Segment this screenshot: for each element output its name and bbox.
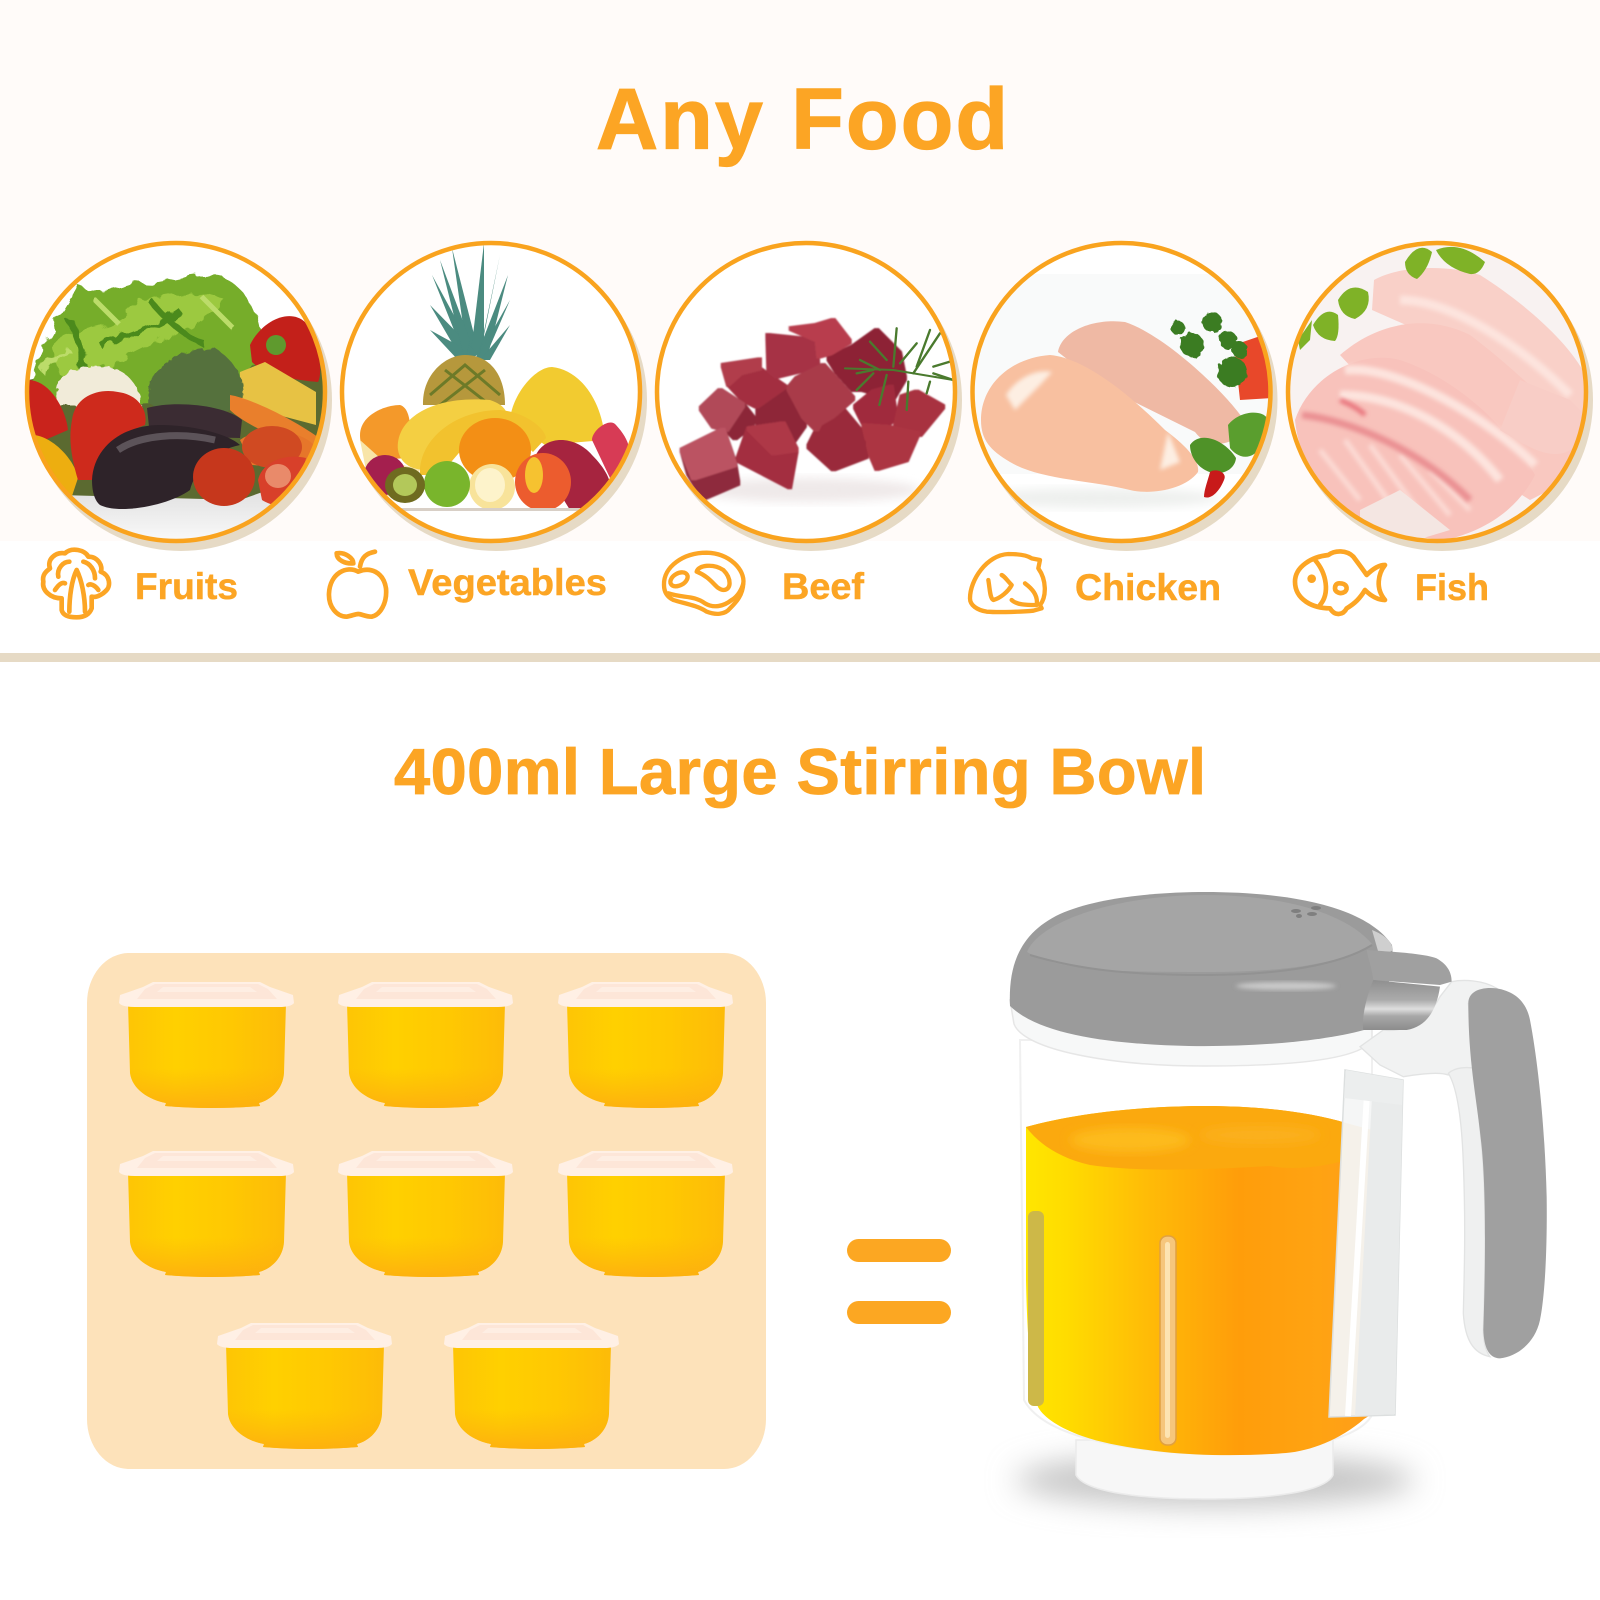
clear handle upper arm — [1360, 980, 1497, 1077]
slot blades — [1028, 1211, 1176, 1445]
lid tab — [1367, 950, 1452, 985]
icon: broccoli — [43, 550, 109, 617]
heading: 400ml Large Stirring Bowl: 400ml Large Stirring Bowl — [394, 735, 1206, 808]
panel: beef photo circle — [657, 243, 962, 551]
handle connector — [1363, 980, 1440, 1030]
label: Vegetables: Vegetables — [408, 562, 607, 603]
clear handle lower arm — [1448, 1068, 1490, 1357]
rosemary sprig — [845, 328, 953, 410]
grey handle grip — [1468, 988, 1547, 1358]
jug shadow — [1015, 1454, 1415, 1506]
cup row 3 — [217, 1323, 619, 1449]
jug glass body — [1020, 1040, 1372, 1454]
panel: fish photo circle — [1288, 243, 1593, 551]
clear front spout — [1329, 1070, 1403, 1417]
top background band — [0, 0, 1600, 541]
label: Fruits: Fruits — [135, 566, 238, 607]
panel: chicken photo circle — [970, 243, 1278, 551]
panel: fruits photo circle — [342, 243, 647, 551]
cup row 1 — [119, 982, 733, 1108]
panel: vegetables photo circle — [20, 243, 340, 551]
icon: fish — [1295, 551, 1385, 614]
icon: apple — [329, 552, 386, 617]
grey lid — [1010, 892, 1393, 1046]
orange liquid — [1026, 1106, 1372, 1455]
panel: eight storage cups — [87, 953, 766, 1469]
blender jug — [1010, 892, 1547, 1506]
lid rim — [1010, 1000, 1372, 1066]
beef cubes — [682, 320, 943, 498]
icon: chicken — [970, 554, 1045, 612]
title: Any Food: Any Food — [596, 72, 1008, 168]
label: Fish: Fish — [1415, 567, 1489, 608]
label: Beef: Beef — [782, 566, 865, 607]
cup row 2 — [119, 1151, 733, 1277]
label: Chicken: Chicken — [1075, 567, 1221, 608]
jug handle assembly — [1360, 950, 1547, 1358]
icon: beef steak — [664, 553, 743, 614]
divider band — [0, 653, 1600, 662]
equals sign — [847, 1239, 951, 1324]
jug base — [1076, 1440, 1333, 1499]
